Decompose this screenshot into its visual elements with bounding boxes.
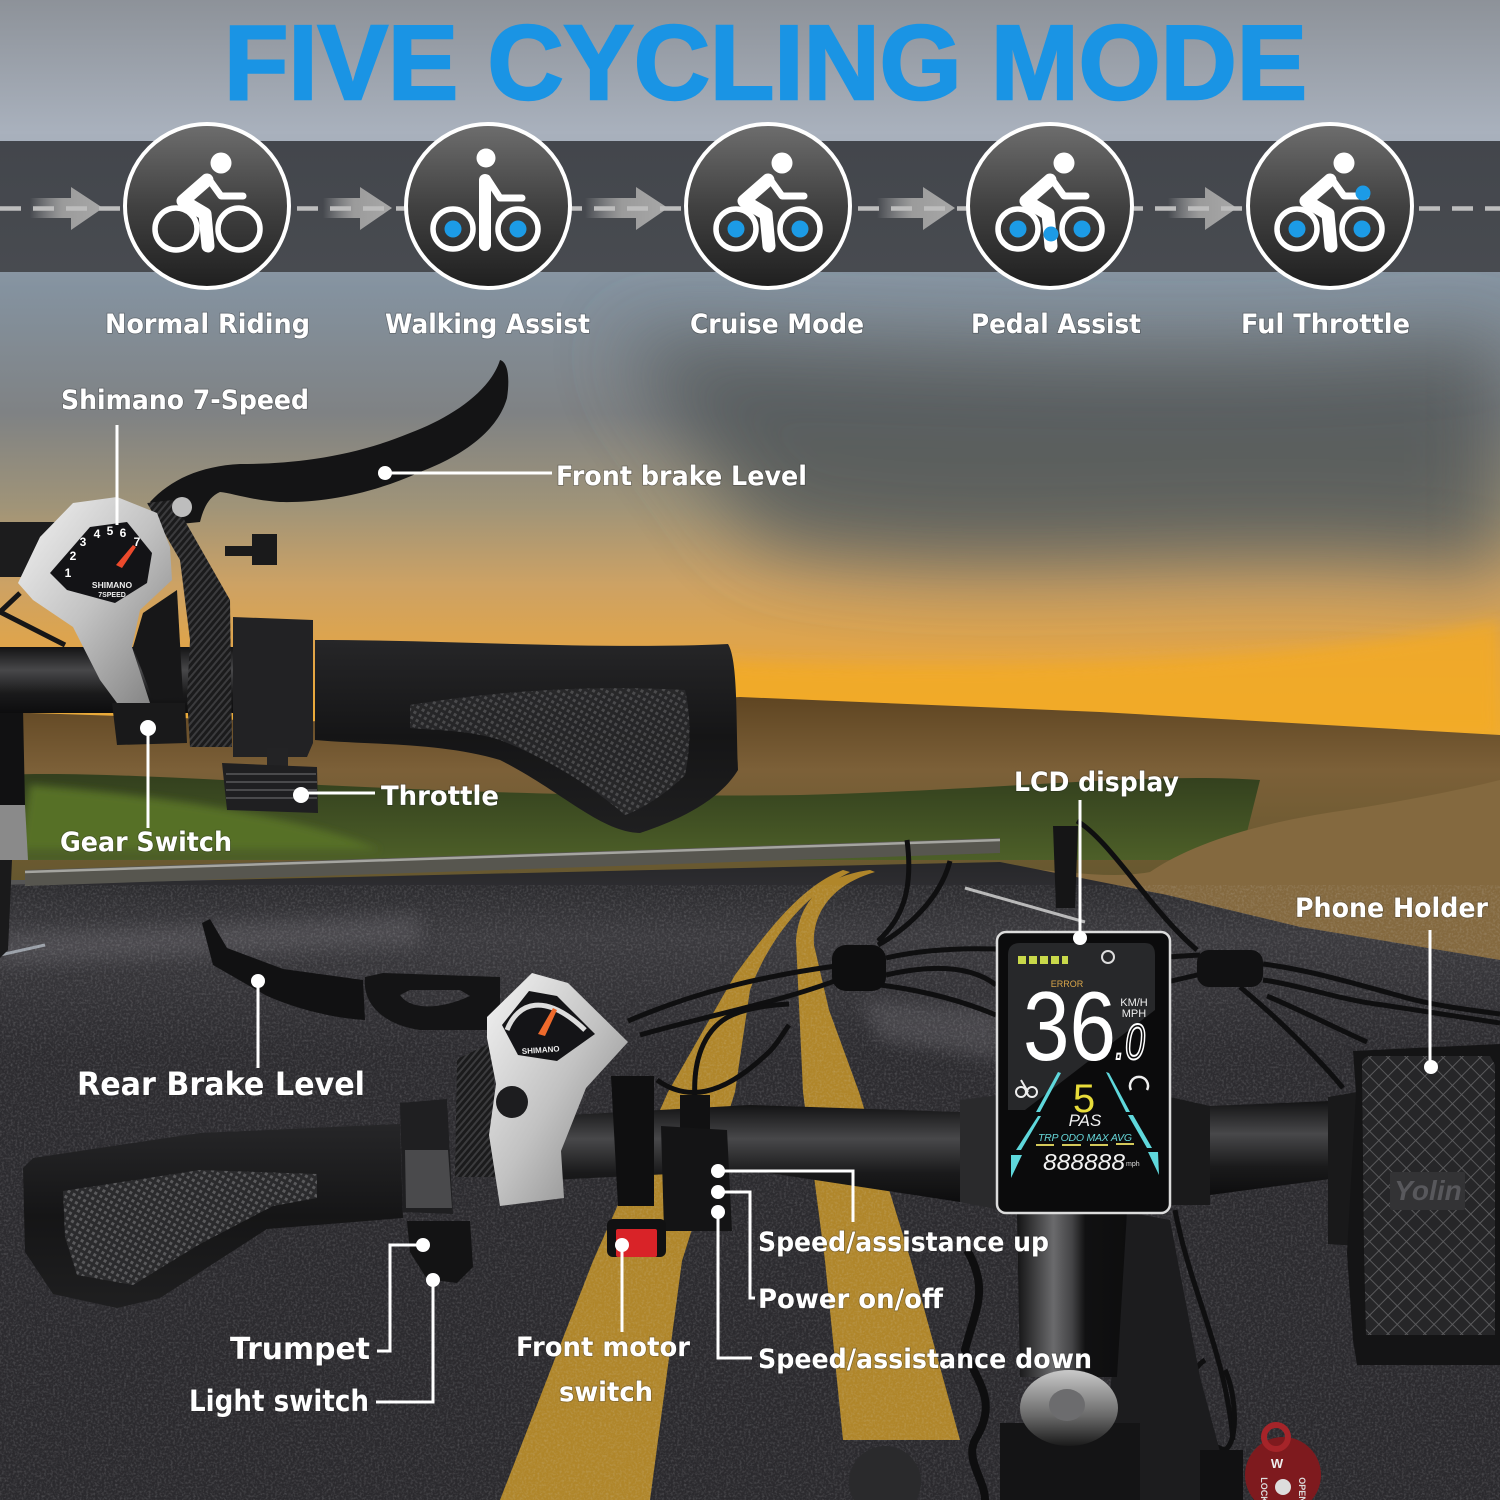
shifter cover bbox=[133, 590, 183, 700]
callout: light switch: Light switch bbox=[189, 1384, 369, 1418]
handlebar tube bbox=[0, 647, 240, 713]
callout: power on/off bbox=[711, 1185, 944, 1315]
callout: front motor switch: Front motor bbox=[516, 1332, 691, 1363]
thin cables bbox=[0, 593, 65, 645]
callout: speed assistance up: Speed/assistance up bbox=[758, 1227, 1049, 1258]
panel: mode band bbox=[0, 141, 1500, 272]
brake lever bbox=[150, 360, 508, 525]
left hub bbox=[960, 1095, 1000, 1210]
key coil bbox=[1200, 1450, 1243, 1500]
callout: rear brake level bbox=[77, 974, 365, 1103]
dial needle bbox=[116, 545, 136, 568]
holder body bbox=[1347, 1044, 1500, 1365]
callout: trumpet: Trumpet bbox=[230, 1332, 370, 1367]
holder clamp bbox=[1328, 1092, 1357, 1246]
button block bbox=[661, 1126, 732, 1231]
dial numbers: 6 bbox=[120, 526, 127, 540]
mode label: walking assist: Walking Assist bbox=[385, 309, 590, 340]
dial numbers: 4 bbox=[94, 527, 101, 541]
callout: speed assistance down bbox=[711, 1205, 1092, 1375]
unit km/h: KM/H bbox=[1120, 997, 1148, 1009]
shifter foot bbox=[112, 703, 187, 745]
collar bbox=[400, 1099, 453, 1214]
dial scale arc bbox=[507, 1005, 585, 1030]
background: sunset sky bbox=[0, 0, 1500, 780]
dial numbers: 5 bbox=[107, 524, 114, 538]
bottom shifter dial bbox=[502, 991, 595, 1061]
callout: gear switch bbox=[60, 720, 232, 858]
screen glare bbox=[1008, 943, 1155, 1110]
round cap bottom bbox=[849, 1446, 921, 1500]
dial numbers: 1 bbox=[65, 566, 72, 580]
right handlebar bbox=[1210, 1101, 1330, 1195]
dial brand: SHIMANO bbox=[92, 580, 132, 590]
arrow 2 bbox=[323, 187, 392, 230]
carbon bracket bbox=[147, 500, 232, 747]
rear brake lever bbox=[202, 919, 365, 1020]
callout: speed assistance up bbox=[711, 1164, 1049, 1258]
icon: walking assist bbox=[406, 124, 570, 288]
arrow 5 bbox=[1168, 187, 1237, 230]
shifter body bbox=[18, 497, 172, 703]
stem base bbox=[1000, 1423, 1140, 1500]
throttle collar bbox=[611, 1076, 654, 1206]
pas label: PAS bbox=[1069, 1111, 1102, 1130]
callout: front brake level: Front brake Level bbox=[556, 461, 807, 492]
left edge silver part bbox=[0, 805, 28, 860]
handlebar: left side display view bbox=[23, 821, 1500, 1500]
assist level: 5 bbox=[1073, 1077, 1095, 1121]
stem cap bolt bbox=[1049, 1389, 1085, 1421]
red motor switch bbox=[616, 1229, 657, 1257]
trip row: TRP ODO MAX AVG bbox=[1038, 1132, 1132, 1144]
icon: cruise mode bbox=[686, 124, 850, 288]
ergonomic grip bbox=[315, 640, 738, 833]
callout: lcd display: LCD display bbox=[1014, 767, 1179, 798]
dial numbers: 3 bbox=[80, 535, 87, 549]
key fob: W bbox=[1271, 1456, 1284, 1471]
bike icon bbox=[1016, 1080, 1037, 1097]
carbon bracket bbox=[455, 1042, 496, 1177]
callout: power on/off: Power on/off bbox=[758, 1284, 944, 1315]
callout: rear brake level: Rear Brake Level bbox=[77, 1065, 365, 1103]
motor switch housing bbox=[607, 1219, 666, 1257]
left grip texture bbox=[63, 1170, 317, 1285]
arrow 3 bbox=[585, 187, 668, 230]
mode label: pedal assist: Pedal Assist bbox=[971, 309, 1141, 340]
error text: ERROR bbox=[1051, 979, 1084, 989]
upper tube bbox=[0, 522, 55, 577]
mode label: cruise mode: Cruise Mode bbox=[690, 309, 864, 340]
stem bbox=[1017, 1212, 1127, 1377]
unit mph: MPH bbox=[1122, 1008, 1146, 1020]
callout: lcd display bbox=[1014, 767, 1179, 945]
callout: trumpet bbox=[230, 1238, 430, 1367]
bottom shifter needle bbox=[538, 1008, 557, 1036]
headlight icon bbox=[1102, 951, 1114, 963]
grip collar bbox=[233, 617, 313, 757]
yellow underline row bbox=[1036, 1144, 1134, 1145]
coiled cable bbox=[965, 1250, 986, 1500]
callout: gear switch: Gear Switch bbox=[60, 827, 232, 858]
stem cap bbox=[1020, 1370, 1118, 1446]
brand tag bbox=[1390, 1172, 1465, 1210]
mode label: ful throttle: Ful Throttle bbox=[1241, 309, 1410, 340]
background: road bbox=[0, 838, 1500, 1500]
throttle thumb lever bbox=[222, 763, 318, 813]
callout: shimano 7-speed: Shimano 7-Speed bbox=[61, 385, 309, 416]
callout: speed assistance down: Speed/assistance down bbox=[758, 1344, 1092, 1375]
icon: full throttle bbox=[1248, 124, 1412, 288]
left edge frame bbox=[0, 660, 25, 805]
callout: phone holder bbox=[1295, 893, 1489, 1074]
brand text: Yolin bbox=[1394, 1175, 1462, 1206]
callout: front brake level bbox=[378, 461, 807, 492]
cable coil left bbox=[832, 945, 886, 991]
grip texture bbox=[410, 688, 690, 815]
callout: phone holder: Phone Holder bbox=[1295, 893, 1489, 924]
background: hills and fields bbox=[0, 697, 1500, 960]
phone holder bbox=[1328, 1044, 1500, 1365]
callout: throttle bbox=[293, 781, 499, 812]
odometer: 888888 bbox=[1043, 1149, 1125, 1175]
dial numbers: 2 bbox=[70, 549, 77, 563]
dial numbers bbox=[65, 524, 141, 580]
mode label: normal riding: Normal Riding bbox=[105, 309, 310, 340]
callout: throttle: Throttle bbox=[381, 781, 499, 812]
main handlebar bbox=[550, 1105, 960, 1202]
title: FIVE CYCLING MODE bbox=[224, 4, 1307, 122]
left edge lower part bbox=[0, 860, 12, 958]
arrow 4 bbox=[877, 187, 955, 230]
cable coil right bbox=[1197, 950, 1263, 987]
icon: normal riding bbox=[125, 124, 289, 288]
bezel bbox=[997, 932, 1170, 1213]
speed decimal: .0 bbox=[1115, 1014, 1145, 1070]
speed value: 36 bbox=[1023, 971, 1116, 1081]
light switch block bbox=[407, 1221, 473, 1283]
bottom shifter body bbox=[487, 973, 628, 1206]
cables bbox=[628, 821, 1500, 1450]
key fob bbox=[1245, 1425, 1321, 1500]
callout: light switch bbox=[189, 1273, 440, 1418]
callout: front motor switch bbox=[516, 1238, 691, 1408]
shifter bolt recess bbox=[496, 1086, 528, 1118]
dial speed: 7SPEED bbox=[98, 592, 126, 599]
bottom shifter brand: SHIMANO bbox=[522, 1044, 560, 1056]
adjuster screw bbox=[225, 534, 277, 565]
odometer unit: mph bbox=[1126, 1161, 1140, 1168]
cyan perspective bars bbox=[1011, 1072, 1159, 1178]
lcd display bbox=[997, 932, 1170, 1213]
second lever with loop bbox=[365, 973, 500, 1030]
icon: pedal assist bbox=[968, 124, 1132, 288]
arrow 1 bbox=[30, 187, 103, 230]
connector bbox=[1053, 826, 1078, 908]
right hub bbox=[1170, 1097, 1210, 1205]
callout: front motor switch: switch bbox=[559, 1377, 653, 1408]
dial numbers: 7 bbox=[134, 535, 141, 549]
shifter dial bbox=[50, 522, 152, 603]
dark mass right of stem bbox=[1100, 1212, 1233, 1500]
lever bolt bbox=[172, 497, 192, 517]
handlebar: right side close-up bbox=[0, 360, 738, 958]
battery indicator bbox=[1018, 956, 1068, 964]
gauge icon bbox=[1130, 1077, 1148, 1090]
left grip bbox=[23, 1124, 403, 1308]
diamond texture bbox=[1362, 1056, 1495, 1335]
throttle stem bbox=[267, 748, 288, 768]
cable hook bbox=[680, 1095, 710, 1130]
